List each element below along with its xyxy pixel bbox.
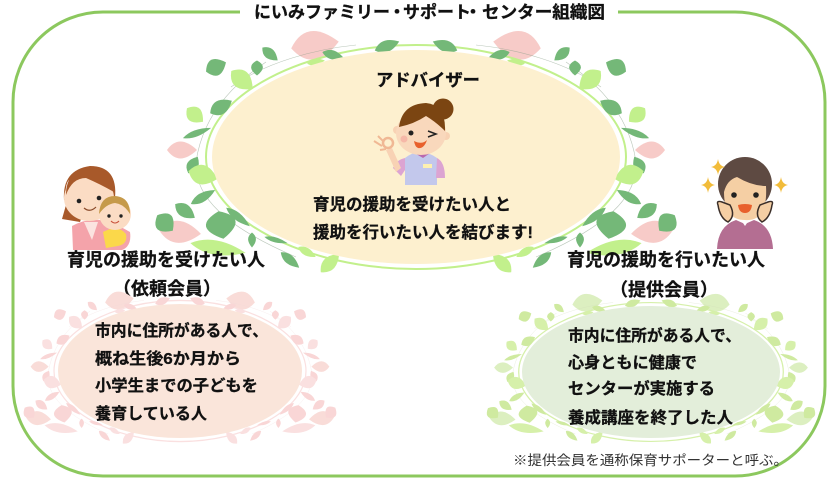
wreath: adviser [150,27,682,277]
panel: requesting member [21,166,339,446]
requesting member text: 市内に住所がある人で、 [95,321,268,340]
providing member text: 心身ともに健康で [568,353,697,372]
icon: older woman with sparkles [701,157,788,249]
footnote: ※提供会員を通称保育サポーターと呼ぶ。 [513,453,788,468]
providing member heading: （提供会員） [610,279,718,300]
requesting member ellipse [58,304,302,438]
requesting member text: 概ね生後6か月から [95,349,241,368]
icon: mother and baby [62,166,131,250]
providing member heading [567,250,765,300]
providing member text: 養成講座を終了した人 [568,408,733,427]
requesting member heading: （依頼会員） [113,279,221,299]
adviser text: 育児の援助を受けたい人と [313,195,511,214]
title: サポート [403,2,471,22]
adviser ellipse [212,50,620,264]
providing member text: 市内に住所がある人で、 [568,326,741,345]
providing member ellipse [522,306,780,438]
title: センター組織図 [482,3,605,22]
requesting member text: 小学生までの子どもを [95,376,258,395]
requesting member text [95,321,268,423]
requesting member heading [67,249,265,299]
wreath: pink [21,289,339,446]
title: ・ [464,3,482,22]
title: ・ [388,3,406,22]
panel: adviser [150,27,682,277]
title: にいみファミリー [254,3,390,22]
providing member text: センターが実施する [568,379,715,398]
requesting member text: 養育している人 [95,404,207,423]
providing member text [568,326,741,427]
adviser text [313,195,533,242]
providing member heading: 育児の援助を行いたい人 [567,250,765,270]
panel: providing member [484,157,818,446]
adviser text: 援助を行いたい人を結びます! [313,223,533,242]
adviser heading: アドバイザー [376,71,480,90]
requesting member heading: 育児の援助を受けたい人 [67,249,265,270]
wreath: green [484,292,818,446]
icon: adviser woman [374,98,454,185]
